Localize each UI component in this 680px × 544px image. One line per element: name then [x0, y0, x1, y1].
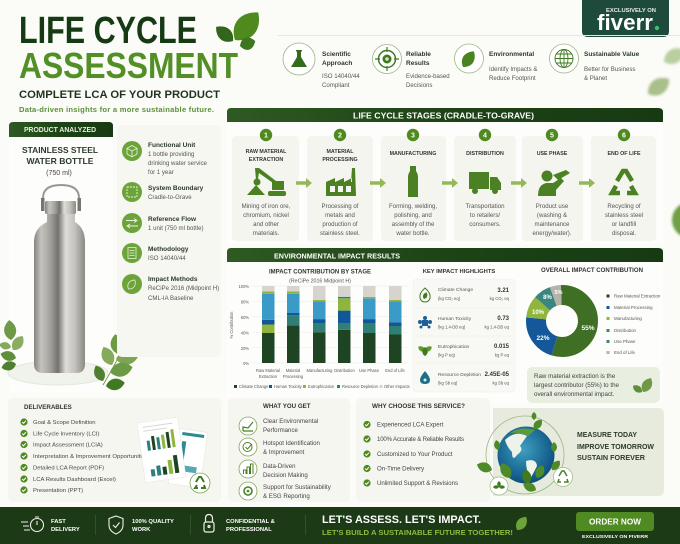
reasons list: 100% Accurate & Reliable Results [377, 436, 464, 443]
icon: botanical leaves left [0, 320, 27, 372]
tagline: Data-driven insights for a more sustainable future. [19, 105, 214, 114]
chart: stacked bar chart: Raw Material [256, 368, 280, 373]
chart: stacked bar chart: 100% [239, 284, 249, 289]
metric: resource depletion [420, 371, 510, 386]
stage 3: manufacturing: water bottle. [395, 230, 430, 237]
badge: reliable results: Reliable [406, 51, 431, 58]
overall impact contribution donut chart: OVERALL IMPACT CONTRIBUTION [541, 267, 644, 274]
heading: life cycle stages [227, 108, 663, 122]
panel: product analyzed: WATER BOTTLE [26, 156, 94, 166]
icon: factory [326, 168, 356, 196]
stage 6: end of life: stainless steel [605, 212, 643, 219]
spec: reference flow: Reference Flow [148, 216, 197, 223]
badge: sustainable value: Better for Business [584, 66, 635, 73]
order now button: ORDER NOW [589, 518, 642, 526]
stage 3: manufacturing: MANUFACTURING [390, 151, 436, 157]
key impact highlights: KEY IMPACT HIGHLIGHTS [423, 269, 495, 275]
badge: scientific approach: Scientific [322, 51, 351, 58]
callout: largest contributor: largest contributor (55%) to the [534, 382, 620, 389]
badge: scientific approach [283, 43, 360, 89]
benefit: clear performance: Performance [263, 427, 298, 434]
panel: product analyzed: (750 ml) [46, 170, 72, 177]
panel: product specifications [117, 125, 221, 357]
metric: human toxicity: kg 1,4-DB eq [485, 324, 510, 330]
spec: impact methods: Impact Methods [148, 276, 198, 283]
spec: reference flow: 1 unit (750 ml bottle) [148, 225, 204, 232]
reasons list: Customized to Your Product [377, 451, 453, 458]
spec: system boundary [122, 182, 204, 202]
panel: measure today [475, 408, 664, 496]
deliverables list: Goal & Scope Definition [33, 420, 96, 426]
donut legend [606, 294, 661, 355]
deliverables list [20, 418, 148, 494]
benefit: data driven: Data-Driven [263, 463, 296, 470]
icon: truck [469, 172, 501, 194]
metric: resource depletion: kg Sb eq [492, 380, 510, 386]
icon: stopwatch [21, 517, 44, 532]
benefit: sustainability support [239, 482, 332, 500]
stage 4: distribution: DISTRIBUTION [466, 151, 504, 157]
stage 4: distribution [454, 129, 516, 241]
chart: stacked bar chart: Extraction [259, 374, 278, 379]
heading: environmental impact results [227, 248, 663, 262]
benefit: clear performance [239, 417, 318, 435]
callout: largest contributor: Raw material extraction is the [534, 373, 616, 380]
spec: functional unit [122, 141, 208, 176]
metric: climate change: Climate Change [438, 287, 473, 293]
overall impact contribution donut chart: 5% [555, 290, 563, 296]
stage 5: use phase [522, 129, 583, 241]
text: quality work [132, 519, 174, 533]
benefit: hotspot identification [239, 438, 320, 456]
deliverables list: Life Cycle Inventory (LCI) [33, 432, 99, 438]
chart legend: Human Toxicity [274, 384, 303, 389]
panel: life cycle stages [227, 108, 663, 244]
chart: stacked bar chart: End of Life [385, 368, 406, 373]
chart: stacked bar chart: 0% [243, 361, 249, 366]
spec: methodology [122, 243, 189, 263]
metric: climate change: (kg CO₂ eq) [438, 296, 461, 301]
icon: bottle [408, 166, 418, 197]
stage 2: material processing: stainless steel. [320, 230, 360, 237]
call to action slogan: LET'S BUILD A SUSTAINABLE FUTURE TOGETHER! [322, 528, 513, 537]
metric: resource depletion: 2.45E-05 [485, 372, 510, 378]
platform [8, 361, 108, 385]
deliverables list: Interpretation & Improvement Opportunities [33, 454, 148, 460]
spec: impact methods: ReCiPe 2016 (Midpoint H) [148, 285, 219, 292]
donut legend: Use Phase [614, 339, 636, 344]
panel: product analyzed: PRODUCT ANALYZED [24, 127, 96, 134]
icon: shield [109, 516, 123, 534]
metric: climate change: kg CO₂ eq [490, 296, 510, 301]
stage 2: material processing: PROCESSING [322, 157, 358, 163]
metric: resource depletion: (kg Sb eq) [438, 380, 458, 386]
stage 4: distribution: 4 [483, 132, 487, 140]
chart legend: Other Impacts [384, 384, 410, 389]
divider [278, 35, 680, 36]
key impact highlights [413, 269, 515, 392]
stage 1: raw material extraction [232, 129, 299, 241]
stage 2: material processing [307, 129, 373, 241]
stage 5: use phase: USE PHASE [537, 151, 568, 157]
image: globe with leaves [475, 412, 572, 495]
title [19, 10, 238, 86]
text: fast delivery [51, 519, 80, 533]
metric: eutrophication: kg P eq [495, 352, 510, 358]
chart: stacked bar chart: Distribution [334, 368, 355, 373]
stage 2: material processing: production of [322, 221, 358, 228]
spec: system boundary: Cradle-to-Grave [148, 194, 192, 201]
chart legend: Eutrophication [308, 384, 335, 389]
stage 2: material processing: metals and [325, 212, 355, 219]
heading: life cycle stages: LIFE CYCLE STAGES (CRADLE-TO-GRAVE) [353, 112, 534, 120]
donut legend: Material Processing [614, 305, 653, 310]
chart: stacked bar chart: Material [286, 368, 300, 373]
text: exclusively on fiverr: EXCLUSIVELY ON FIVERR [582, 534, 649, 540]
donut legend: Manufacturing [614, 316, 642, 321]
spec: impact methods: CML-IA Baseline [148, 295, 194, 302]
panel: what you get [228, 398, 350, 502]
deliverables list: Presentation (PPT) [33, 488, 83, 494]
reasons list [363, 421, 464, 487]
image: steel water bottle [34, 185, 85, 373]
stage 1: raw material extraction: Mining of iron ore, [242, 203, 291, 210]
donut legend: End of Life [614, 350, 636, 355]
metric: eutrophication [417, 344, 510, 358]
chart: stacked bar chart: 80% [241, 300, 249, 304]
icon: padlock [204, 514, 214, 532]
donut legend: Raw Material Extraction [614, 294, 661, 298]
badge: scientific approach: Approach [322, 60, 352, 67]
metric: human toxicity: Human Toxicity [438, 316, 472, 322]
stage 1: raw material extraction: 1 [264, 132, 268, 140]
stage 3: manufacturing [381, 129, 446, 241]
stage 2: material processing: MATERIAL [327, 149, 354, 155]
benefit: sustainability support: & ESG Reporting [263, 493, 310, 500]
stage 3: manufacturing: Forming, welding, [389, 203, 437, 210]
icon: title leaves [212, 5, 266, 52]
panel: product analyzed: STAINLESS STEEL [22, 145, 98, 155]
stage 2: material processing: Processing of [322, 203, 359, 210]
badge: environmental [454, 44, 537, 82]
metric: human toxicity: 0.73 [497, 316, 510, 322]
icon: callout leaf [631, 376, 655, 395]
badge: reliable results: Results [406, 60, 430, 67]
chart: stacked bar chart: Manufacturing [307, 368, 333, 373]
stage 6: end of life: disposal. [612, 230, 636, 237]
overall impact contribution donut chart: 10% [532, 310, 545, 316]
deliverables list: Detailed LCA Report (PDF) [33, 466, 104, 472]
chart: stacked bar chart [229, 268, 410, 389]
chart: stacked bar chart: Use Phase [359, 368, 380, 373]
stage 3: manufacturing: polishing, and [394, 212, 432, 219]
footer bar [0, 507, 680, 544]
chart: stacked bar chart: % Contribution [229, 311, 234, 338]
chart: stacked bar chart: (ReCiPe 2016 Midpoint H) [289, 278, 351, 284]
spec: impact methods [122, 274, 219, 302]
callout: largest contributor [527, 367, 660, 403]
stage 5: use phase: energy/water). [533, 230, 572, 237]
stage 2: material processing: 2 [338, 132, 342, 140]
spec: functional unit: Functional Unit [148, 142, 196, 149]
stage 1: raw material extraction: materials. [253, 230, 280, 237]
stage 5: use phase: 5 [550, 132, 554, 140]
text: quality work: WORK [132, 527, 151, 533]
icon: footer leaf [513, 514, 530, 533]
chart: stacked bar chart: 20% [241, 346, 249, 351]
panel: measure today: SUSTAIN FOREVER [577, 455, 645, 462]
fiverr badge [582, 0, 669, 37]
panel: deliverables: DELIVERABLES [24, 404, 72, 411]
text: confidential [226, 519, 275, 533]
metric: human toxicity [418, 316, 510, 330]
text: confidential: PROFESSIONAL [226, 527, 272, 533]
decorative right leaves [644, 44, 680, 238]
overall impact contribution donut chart: 22% [536, 335, 550, 342]
stage 6: end of life: 6 [622, 132, 626, 140]
badge: environmental: Environmental [489, 51, 534, 58]
badge: reliable results: Decisions [406, 82, 432, 89]
text: confidential: CONFIDENTIAL & [226, 519, 275, 525]
stage 5: use phase: (washing & [537, 212, 567, 219]
benefit: clear performance: Clear Environmental [263, 418, 318, 425]
chart legend [234, 384, 410, 389]
chart: stacked bar chart: IMPACT CONTRIBUTION BY STAGE [269, 268, 371, 276]
heading: environmental impact results: ENVIRONMENTAL IMPACT RESULTS [274, 252, 400, 260]
subtitle: COMPLETE LCA OF YOUR PRODUCT [19, 89, 221, 101]
stage 1: raw material extraction: and other [253, 221, 279, 228]
icon: recycle badge [190, 473, 210, 493]
panel: why choose this service: WHY CHOOSE THIS SERVICE? [372, 403, 465, 410]
icon: botanical leaves right [91, 333, 138, 392]
badge: scientific approach: ISO 14040/44 [322, 73, 360, 80]
text: quality work: 100% QUALITY [132, 519, 174, 525]
donut legend: Distribution [614, 328, 637, 333]
metric: climate change: 3.21 [497, 288, 510, 294]
arrows between stages [296, 178, 595, 188]
metric: eutrophication: Eutrophication [438, 344, 470, 350]
panel: measure today: IMPROVE TOMORROW [577, 444, 654, 451]
badge: environmental: Reduce Footprint [489, 75, 536, 82]
stage 1: raw material extraction: chromium, nickel [243, 212, 289, 219]
order now button [576, 512, 654, 531]
overall impact contribution donut chart: 8% [543, 295, 553, 301]
stage 6: end of life [591, 129, 656, 241]
metric: climate change [420, 287, 510, 302]
image: report documents [137, 417, 208, 488]
title: LIFE CYCLE [19, 10, 197, 52]
reasons list: Experienced LCA Expert [377, 422, 444, 428]
metric: eutrophication: 0.015 [494, 344, 510, 350]
badge: sustainable value [550, 44, 640, 82]
badge: reliable results [372, 44, 450, 89]
badge: scientific approach: Compliant [322, 82, 350, 89]
spec: reference flow [122, 213, 204, 233]
reasons list: Unlimited Support & Revisions [377, 480, 458, 487]
deliverables list: Impact Assessment (LCIA) [33, 442, 103, 448]
spec: functional unit: for 1 year [148, 169, 174, 176]
badge: reliable results: Evidence-based [406, 73, 450, 80]
stage 6: end of life: Recycling of [607, 203, 641, 210]
spec: system boundary: System Boundary [148, 185, 204, 192]
chart legend: Climate Change [239, 384, 269, 389]
spec: methodology: Methodology [148, 246, 189, 253]
stage 4: distribution: to retailers/ [470, 212, 500, 219]
spec: methodology: ISO 14040/44 [148, 255, 186, 262]
panel: product analyzed [0, 122, 138, 392]
stage 1: raw material extraction: EXTRACTION [249, 157, 283, 163]
text: fast delivery: DELIVERY [51, 527, 80, 533]
overall impact contribution donut chart [532, 267, 661, 355]
panel: environmental impact results [227, 248, 663, 403]
title: ASSESSMENT [19, 45, 238, 86]
callout: largest contributor: overall environmental impact. [534, 391, 615, 398]
overall impact contribution donut chart: 55% [581, 325, 595, 332]
panel: what you get: WHAT YOU GET [263, 403, 311, 410]
badge: environmental: Identify Impacts & [489, 66, 537, 73]
benefit: hotspot identification: Hotspot Identification [263, 440, 320, 447]
benefit: data driven [239, 460, 308, 479]
fiverr badge: fiverr [597, 10, 653, 35]
chart legend: Resource Depletion [342, 384, 379, 389]
stage 1: raw material extraction: RAW MATERIAL [246, 149, 287, 155]
badge: sustainable value: Sustainable Value [584, 51, 640, 58]
chart: stacked bar chart: 60% [241, 315, 249, 320]
icon: excavator [247, 168, 286, 196]
stage 3: manufacturing: 3 [411, 132, 415, 140]
metric: resource depletion: Resource Depletion [438, 372, 481, 378]
text: fast delivery: FAST [51, 519, 66, 525]
reasons list: On-Time Delivery [377, 466, 425, 472]
spec: functional unit: drinking water service [148, 160, 208, 167]
stage 5: use phase: Product use [536, 203, 569, 210]
spec: functional unit: 1 bottle providing [148, 151, 194, 158]
icon: person drinking [538, 170, 570, 196]
panel: deliverables [8, 398, 221, 502]
icon: recycle [612, 171, 635, 193]
stage 3: manufacturing: assembly of the [392, 221, 435, 228]
stage 6: end of life: or landfill [612, 221, 636, 228]
benefit: hotspot identification: & Improvement [263, 449, 305, 456]
badge: sustainable value: & Planet [584, 75, 607, 82]
stage 6: end of life: END OF LIFE [608, 151, 641, 157]
stage 4: distribution: Transportation [465, 203, 505, 210]
panel: why choose this service [356, 398, 490, 502]
call to action slogan [322, 514, 513, 537]
chart: stacked bar chart: 40% [241, 330, 249, 335]
benefit: data driven: Decision Making [263, 472, 308, 479]
metric: human toxicity: (kg 1,4-DB eq) [438, 324, 466, 330]
stage 5: use phase: maintenance [535, 221, 570, 228]
chart: stacked bar chart: Processing [283, 374, 304, 379]
metric: eutrophication: (kg P eq) [438, 352, 456, 358]
call to action slogan: LET'S ASSESS. LET'S IMPACT. [322, 514, 481, 526]
panel: measure today: MEASURE TODAY [577, 432, 637, 439]
deliverables list: LCA Results Dashboard (Excel) [33, 477, 116, 483]
stage 4: distribution: consumers. [469, 221, 501, 228]
fiverr badge: EXCLUSIVELY ON [606, 8, 656, 14]
benefit: sustainability support: Support for Sustainability [263, 484, 332, 491]
